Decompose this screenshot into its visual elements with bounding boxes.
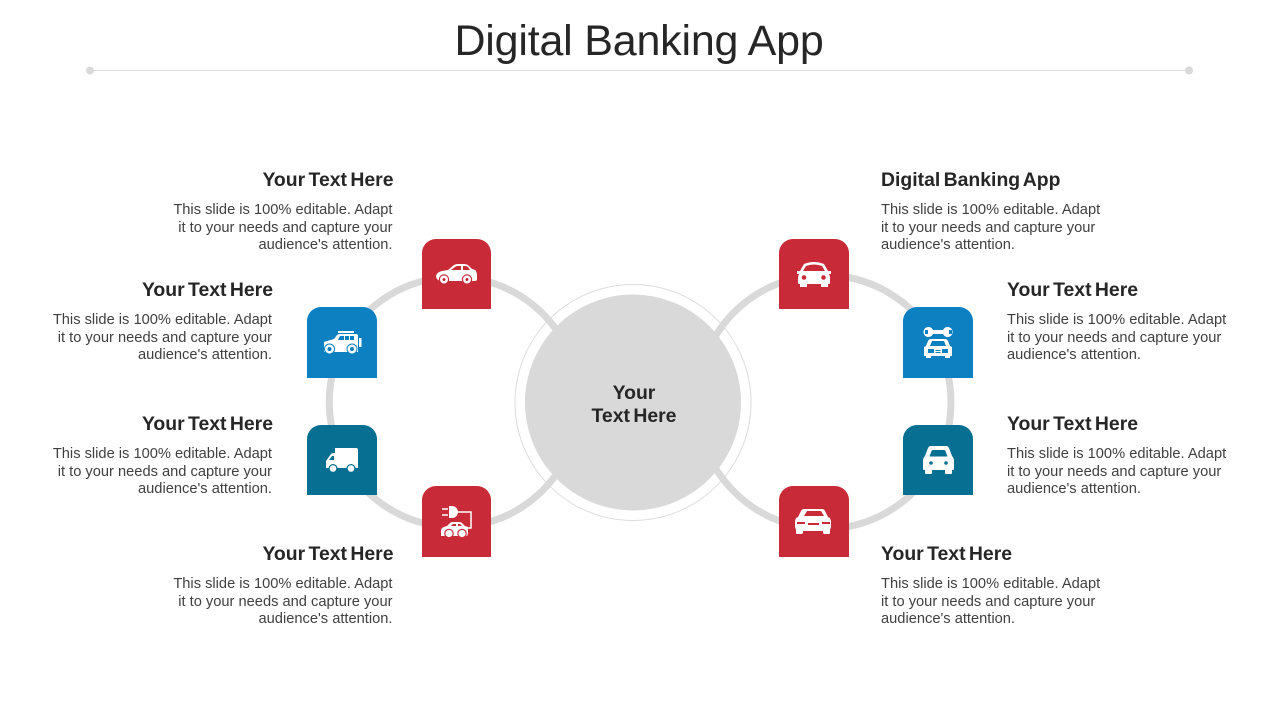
- tile: electric car: [422, 486, 491, 557]
- text block: top left: [173, 169, 394, 253]
- text block: upper left: Your Text Here: [142, 279, 273, 301]
- centre label: Text Here: [592, 405, 676, 427]
- text block: bottom right: it to your needs and capture your: [881, 594, 1095, 610]
- text block: upper right: [1007, 279, 1226, 363]
- text block: bottom right: [881, 543, 1100, 627]
- text block: lower left: audience's attention.: [138, 481, 272, 497]
- text block: lower right: [1007, 413, 1226, 497]
- text block: top right: This slide is 100% editable. Adapt: [881, 202, 1100, 218]
- text block: lower right: Your Text Here: [1007, 413, 1138, 435]
- text block: upper left: [53, 279, 273, 363]
- text block: bottom left: [173, 543, 394, 627]
- text block: top left: audience's attention.: [258, 237, 392, 253]
- text block: upper left: it to your needs and capture your: [58, 330, 272, 346]
- text block: upper right: Your Text Here: [1007, 279, 1138, 301]
- text block: bottom left: Your Text Here: [262, 543, 394, 565]
- text block: lower right: it to your needs and capture your: [1007, 464, 1221, 480]
- text block: lower right: This slide is 100% editable. Adapt: [1007, 446, 1226, 462]
- text block: bottom left: This slide is 100% editable. Adapt: [173, 576, 392, 592]
- text block: lower left: it to your needs and capture your: [58, 464, 272, 480]
- centre label: [592, 382, 676, 427]
- title rule: [86, 66, 1193, 74]
- text block: top right: [881, 169, 1100, 253]
- text block: lower left: Your Text Here: [142, 413, 273, 435]
- text block: upper right: This slide is 100% editable. Adapt: [1007, 312, 1226, 328]
- tile: sedan front: [779, 486, 849, 557]
- text block: lower right: audience's attention.: [1007, 481, 1141, 497]
- text block: upper right: it to your needs and capture your: [1007, 330, 1221, 346]
- text block: top left: This slide is 100% editable. Adapt: [173, 202, 392, 218]
- tile: car repair: [903, 307, 973, 378]
- tile: front car: [779, 239, 849, 309]
- text block: bottom left: it to your needs and capture your: [178, 594, 392, 610]
- text block: upper left: audience's attention.: [138, 347, 272, 363]
- text block: top left: it to your needs and capture your: [178, 220, 392, 236]
- text block: top left: Your Text Here: [262, 169, 394, 191]
- text block: bottom right: Your Text Here: [881, 543, 1012, 565]
- text block: bottom right: audience's attention.: [881, 611, 1015, 627]
- tile: suv: [307, 307, 377, 378]
- centre circle: [515, 284, 751, 520]
- tile: compact car: [903, 425, 973, 495]
- title: Digital Banking App: [454, 17, 824, 65]
- text block: upper left: This slide is 100% editable. Adapt: [53, 312, 272, 328]
- left ring arc: [329, 277, 565, 527]
- text block: bottom left: audience's attention.: [258, 611, 392, 627]
- tile: delivery truck: [307, 425, 377, 495]
- text block: top right: Digital Banking App: [881, 169, 1060, 191]
- text block: bottom right: This slide is 100% editable. Adapt: [881, 576, 1100, 592]
- text block: upper right: audience's attention.: [1007, 347, 1141, 363]
- text block: top right: audience's attention.: [881, 237, 1015, 253]
- text block: lower left: [53, 413, 273, 497]
- text block: lower left: This slide is 100% editable. Adapt: [53, 446, 272, 462]
- right ring arc: [710, 275, 951, 529]
- centre label: Your: [613, 382, 655, 404]
- text block: top right: it to your needs and capture your: [881, 220, 1095, 236]
- tile: sedan car: [422, 239, 491, 309]
